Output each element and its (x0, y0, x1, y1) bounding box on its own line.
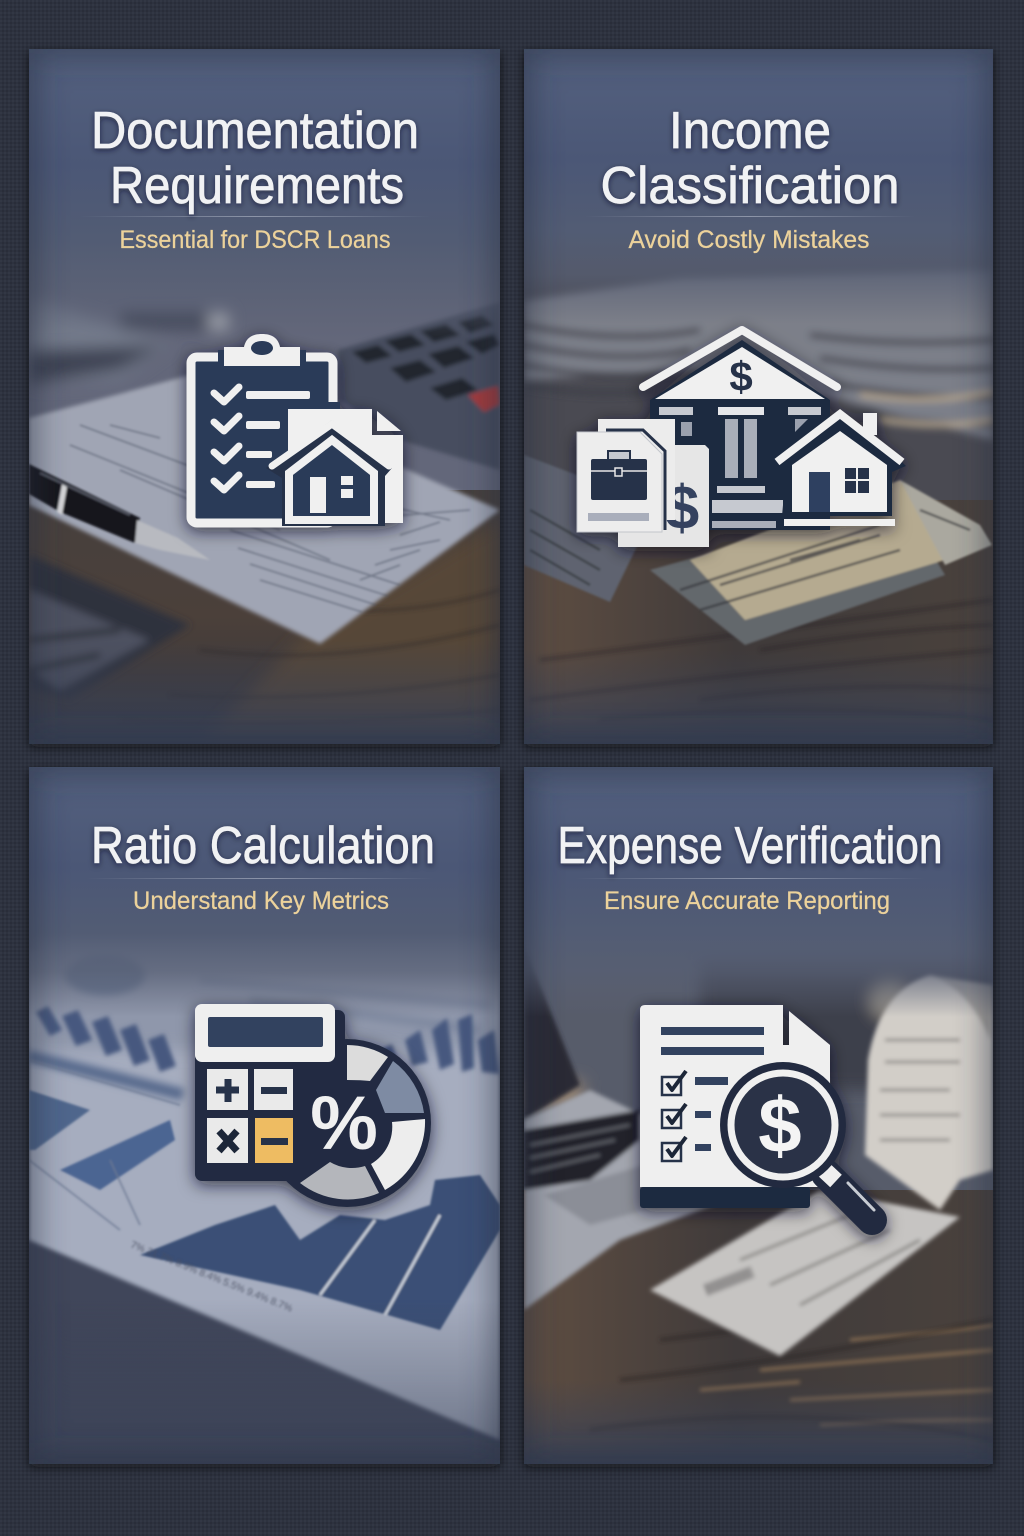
calculator screen (195, 1004, 335, 1062)
clipboard clip (224, 334, 300, 366)
house (772, 410, 906, 526)
pie segments (300, 1045, 425, 1199)
title: income classification: Classification (600, 157, 900, 215)
bank: $ (729, 353, 753, 400)
icon: calculator with percent pie (195, 1004, 431, 1207)
title: documentation requirements: Requirements (110, 157, 404, 215)
documents: $ (665, 474, 699, 543)
panel: income classification (514, 39, 1003, 754)
panel A desk photo (19, 39, 510, 754)
checklist (662, 1077, 681, 1161)
panel D card (524, 767, 993, 1464)
panel: ratio calculation (19, 757, 510, 1474)
document with house (288, 409, 403, 523)
magnifier: $ (758, 1081, 802, 1169)
title: income classification (600, 102, 900, 215)
panel B card (524, 49, 993, 744)
panel B paper stacks and money photo (514, 39, 1003, 754)
bank (643, 330, 837, 530)
panel: documentation requirements (19, 39, 510, 754)
title: income classification: Income (669, 102, 831, 160)
documents (577, 419, 709, 547)
panel A card (29, 49, 500, 744)
percent sign: % (310, 1081, 378, 1166)
panel D laptop and receipts photo (514, 757, 1003, 1474)
subtitle: Ensure Accurate Reporting (604, 887, 890, 915)
title: documentation requirements: Documentation (91, 102, 419, 160)
icon: bank, documents and house (577, 330, 906, 547)
subtitle: Understand Key Metrics (133, 887, 389, 915)
checklist (214, 387, 239, 490)
subtitle: Essential for DSCR Loans (120, 226, 390, 254)
magnifier (720, 1062, 874, 1220)
title: ratio calculation: Ratio Calculation (91, 817, 435, 875)
panel C charts photo (19, 757, 510, 1474)
panel: expense verification (514, 757, 1003, 1474)
subtitle: Avoid Costly Mistakes (628, 226, 870, 254)
title: expense verification: Expense Verification (558, 817, 942, 875)
icon: clipboard with house document (191, 334, 403, 526)
document (640, 1187, 810, 1208)
panel C charts photo: 7% 21.7% 8.9% 8.4% 5.5% 9.4% 8.7% (129, 1240, 294, 1315)
keys (207, 1069, 293, 1163)
title: documentation requirements (91, 102, 419, 215)
panel C card (29, 767, 500, 1464)
icon: document with magnifier (640, 1005, 874, 1220)
